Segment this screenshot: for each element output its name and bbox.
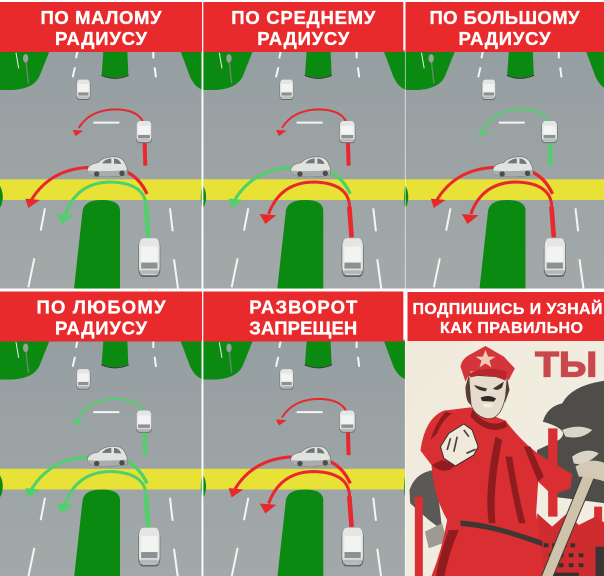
heading — [0, 2, 202, 52]
cars — [76, 369, 160, 566]
panel: any radius — [0, 292, 202, 576]
factory buildings — [537, 513, 604, 576]
heading: ПО МАЛОМУ — [40, 7, 162, 28]
panel: u-turn prohibited — [203, 292, 405, 576]
poster illustration — [406, 340, 604, 576]
cars — [76, 80, 160, 277]
heading: РАДИУСУ — [257, 28, 350, 49]
turn arrows — [431, 109, 554, 237]
pointing hand — [440, 424, 478, 466]
heading: РАДИУСУ — [55, 318, 147, 338]
panel: large radius — [406, 2, 604, 289]
stick tool — [540, 468, 596, 576]
slogan word: ТЫ — [535, 346, 597, 385]
heading: РАДИУСУ — [458, 28, 551, 49]
factory chimneys — [415, 428, 602, 576]
road scene — [0, 339, 202, 576]
heading: ЗАПРЕЩЕН — [249, 318, 357, 338]
heading — [0, 292, 202, 342]
turn arrows — [25, 109, 149, 237]
heading — [408, 292, 604, 341]
turn arrows — [229, 109, 352, 237]
heading: РАДИУСУ — [55, 28, 147, 49]
figure body — [420, 407, 572, 576]
panel: small radius — [0, 2, 202, 289]
road scene — [203, 339, 405, 576]
turn arrows — [25, 399, 149, 527]
heading: ПОДПИШИСЬ И УЗНАЙ — [412, 299, 602, 318]
belt — [460, 521, 543, 547]
panel: subscribe poster — [406, 292, 604, 576]
road scene — [0, 50, 202, 289]
heading: ПО СРЕДНЕМУ — [231, 7, 376, 28]
red cap with star — [460, 346, 515, 382]
cars — [280, 369, 364, 566]
panel: medium radius — [203, 2, 405, 289]
heading — [203, 292, 403, 342]
heading: ПО ЛЮБОМУ — [36, 296, 166, 318]
road scene — [406, 50, 604, 289]
cars — [482, 80, 566, 277]
face — [469, 375, 507, 419]
heading — [203, 2, 403, 52]
heading: ПО БОЛЬШОМУ — [430, 7, 580, 28]
heading: РАЗВОРОТ — [249, 296, 358, 318]
turn arrows — [229, 399, 352, 527]
road scene — [203, 50, 405, 289]
heading: КАК ПРАВИЛЬНО — [440, 320, 583, 337]
heading — [406, 2, 604, 52]
smoke — [537, 381, 604, 503]
cars — [280, 80, 364, 277]
